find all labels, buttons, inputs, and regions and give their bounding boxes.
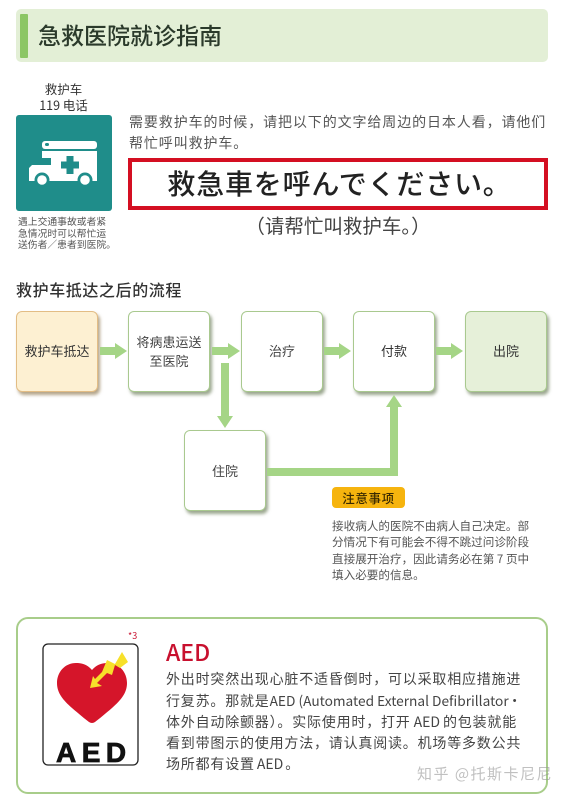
flow step: ambulance arrives — [16, 311, 98, 392]
flow arrows — [100, 343, 463, 476]
ambulance heading: 救护车 — [45, 79, 82, 98]
AED body text: 看到带图示的使用方法，请认真阅读。机场等多数公共 — [166, 733, 521, 753]
flow step: treatment — [241, 311, 323, 392]
icon: ambulance — [16, 115, 112, 211]
flow step: payment — [353, 311, 435, 392]
flow step: ambulance arrives: 救护车抵达 — [24, 341, 90, 360]
arrow: hospitalization up to payment — [267, 395, 402, 476]
instruction text: 需要救护车的时候，请把以下的文字给周边的日本人看，请他们 — [129, 112, 546, 132]
note text: 接收病人的医院不由病人自己决定。部 — [332, 518, 529, 534]
arrow: treatment to payment — [324, 343, 351, 359]
arrow: transport to treatment — [212, 343, 240, 359]
note text: 直接展开治疗，因此请务必在第 7 页中 — [332, 551, 529, 567]
flow step: transport to hospital — [128, 311, 210, 392]
note text: 填入必要的信息。 — [332, 567, 425, 583]
ambulance caption — [18, 214, 116, 251]
title accent bar — [20, 14, 28, 58]
flow step: treatment: 治疗 — [269, 341, 295, 360]
arrow: transport down to hospitalization — [217, 363, 233, 428]
arrow: payment to discharge — [436, 343, 463, 359]
translation: （请帮忙叫救护车。） — [245, 210, 431, 239]
flow step: discharge — [465, 311, 547, 392]
ambulance heading — [39, 79, 88, 114]
AED body text: 外出时突然出现心脏不适昏倒时，可以采取相应措施进 — [166, 669, 521, 689]
title text: 急救医院就诊指南 — [38, 17, 222, 51]
title banner — [16, 9, 548, 62]
note badge — [332, 487, 405, 508]
flow step: transport to hospital: 至医院 — [149, 350, 188, 370]
flow step: transport to hospital: 将病患运送 — [136, 332, 202, 350]
ambulance caption: 急情况时可以帮忙运 — [18, 226, 106, 240]
flow step: hospitalization: 住院 — [212, 461, 238, 480]
panel: AED — [16, 617, 548, 794]
red callout: Japanese phrase — [128, 158, 548, 210]
AED heading: AED — [166, 634, 210, 668]
note text: 分情况下有可能会不得不跳过问诊阶段 — [332, 534, 529, 550]
flow heading: 救护车抵达之后的流程 — [16, 277, 182, 301]
flow step: discharge: 出院 — [493, 341, 519, 360]
red callout: Japanese phrase: 救急車を呼んでください。 — [167, 163, 512, 203]
ambulance caption: 遇上交通事故或者紧 — [18, 214, 106, 228]
watermark: 知乎 @托斯卡尼尼 — [417, 763, 553, 784]
arrow: arrive to transport — [100, 343, 127, 359]
instruction text: 帮忙呼叫救护车。 — [129, 133, 248, 153]
note text — [332, 518, 529, 583]
instruction text — [129, 112, 546, 153]
footnote mark: *3 — [128, 629, 137, 642]
AED body text: 场所都有设置AED。 — [166, 754, 300, 774]
ambulance heading: 119 电话 — [39, 95, 88, 114]
icon: AED sign — [42, 643, 139, 767]
note badge: 注意事项 — [342, 488, 395, 507]
flow step: hospitalization — [184, 430, 266, 511]
AED body text: 行复苏。那就是AED (Automated External Defibrillator・ — [166, 690, 522, 711]
flow step: payment: 付款 — [381, 341, 407, 360]
AED body text — [166, 669, 522, 774]
ambulance caption: 送伤者／患者到医院。 — [18, 237, 116, 251]
AED body text: 体外自动除颤器）。实际使用时，打开AED的包装就能 — [166, 712, 517, 732]
